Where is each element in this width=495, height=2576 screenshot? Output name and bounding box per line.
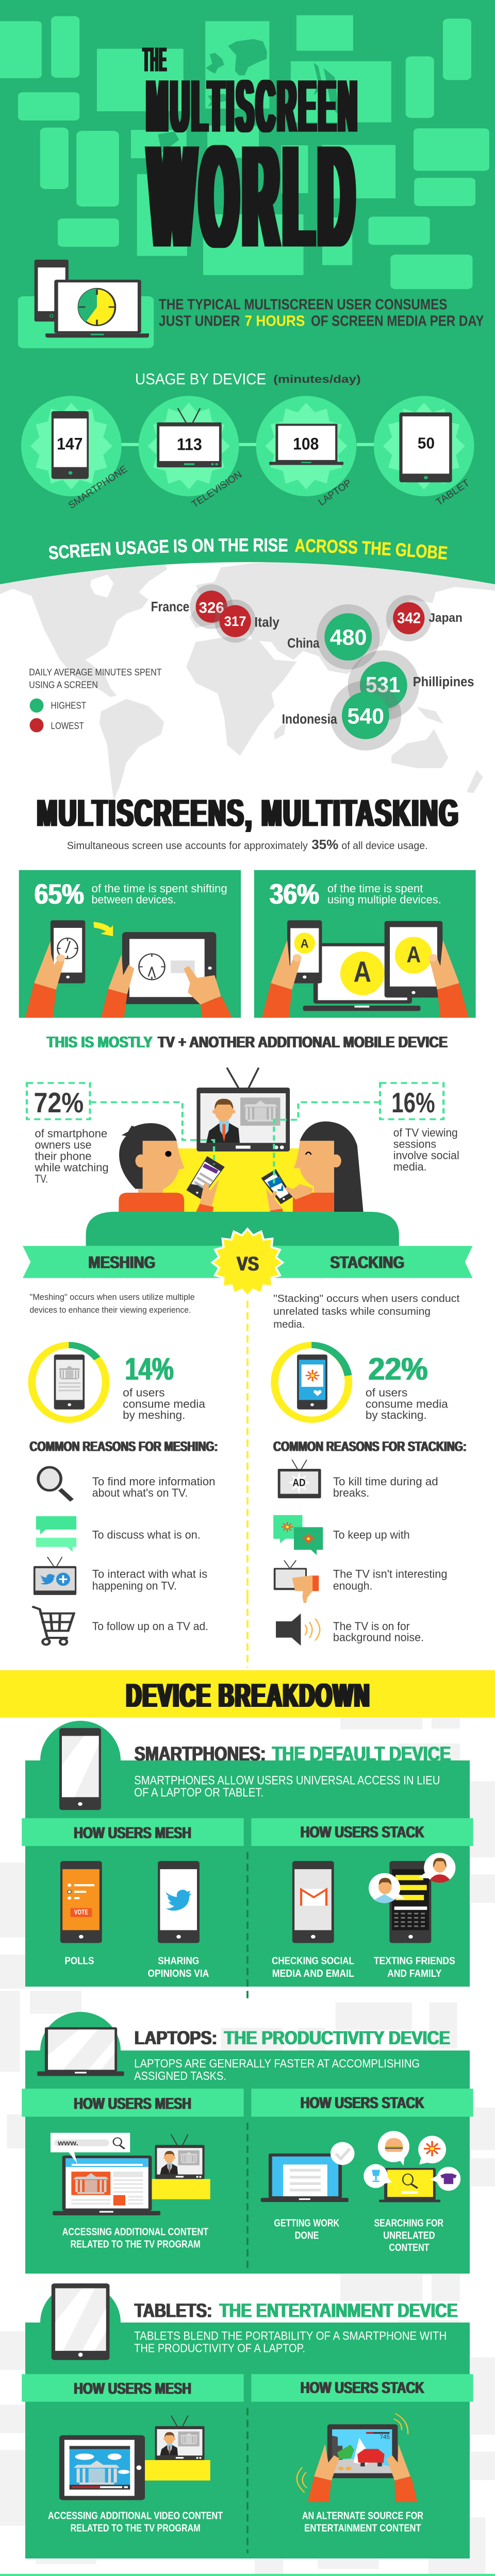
usage: smartphone — [21, 396, 122, 496]
reason: kill time during ad breaks: To kill time during ad — [333, 1476, 438, 1488]
bar: how users mesh: HOW USERS MESH — [74, 2380, 191, 2398]
map bubble: Japan: Japan — [428, 611, 463, 625]
panel: shifting between devices: 65% — [35, 878, 84, 910]
heading: smartphones: SMARTPHONES: — [135, 1742, 266, 1765]
panel: shifting between devices: between devices. — [92, 894, 176, 906]
heading: tablets — [135, 2299, 458, 2321]
heading: laptops — [135, 2027, 450, 2048]
reason: tv not interesting: enough. — [333, 1580, 372, 1592]
reason: keep up with: To keep up with — [333, 1529, 410, 1541]
bar: how users stack — [251, 2374, 473, 2402]
icon: laptop showing letter A: A — [354, 956, 371, 988]
green header background — [0, 0, 495, 584]
bar: how users mesh: HOW USERS MESH — [74, 2094, 191, 2112]
background screens — [0, 1718, 495, 1989]
panel: laptops — [25, 2012, 470, 2274]
icon: phone showing letter A in hand: A — [301, 937, 309, 951]
item: texting friends and family — [369, 1853, 455, 1979]
item: searching for unrelated content: CONTENT — [389, 2242, 430, 2253]
stat: 72 percent: of smartphone — [35, 1128, 107, 1140]
donut: 22 percent stacking — [275, 1345, 349, 1420]
reason: interact — [34, 1557, 207, 1595]
panel: tablets — [25, 2283, 470, 2558]
stat: 16 percent — [274, 1083, 459, 1183]
background screens — [0, 1991, 495, 2370]
text: laptops description: ASSIGNED TASKS. — [134, 2069, 226, 2082]
stat: 72 percent: owners use — [35, 1139, 92, 1151]
icon: tablet with clock and hands — [101, 932, 232, 1018]
stat: 16 percent: of TV viewing — [393, 1127, 458, 1140]
yellow backdrop — [163, 1148, 314, 1212]
ribbon: meshing vs stacking — [23, 1246, 472, 1278]
background screens — [0, 16, 489, 348]
map bubble: France: 326 — [199, 599, 224, 616]
panel: using multiple devices — [254, 870, 476, 1018]
icon: big laptop — [37, 2027, 124, 2076]
map bubble: France: France — [151, 599, 189, 615]
map bubble: Italy — [214, 600, 279, 642]
panel: using multiple devices: using multiple devices. — [327, 894, 441, 906]
globe screens — [97, 15, 395, 275]
reason: find more information — [38, 1467, 216, 1500]
text: stacking definition — [273, 1293, 460, 1330]
badge: vs: VS — [237, 1252, 259, 1275]
stat: 16 percent: sessions — [393, 1138, 436, 1150]
item: getting work done: GETTING WORK — [274, 2217, 339, 2229]
item: accessing additional video content — [48, 2416, 223, 2534]
item: texting friends and family: TEXTING FRIENDS — [374, 1955, 455, 1967]
text: meshing definition: "Meshing" occurs when users utilize multiple — [30, 1292, 195, 1302]
dashed divider — [246, 1852, 249, 1999]
dashed divider end — [246, 1597, 249, 1668]
map bubble: China: 480 — [330, 625, 367, 650]
device labels — [67, 464, 472, 511]
stat: 16 percent: media. — [393, 1161, 427, 1173]
icon: laptop showing letter A — [303, 943, 420, 1011]
text: tablets description — [134, 2329, 447, 2355]
heading: smartphones — [135, 1742, 451, 1765]
stat: 14 percent: by meshing. — [123, 1409, 185, 1422]
usage: television: 113 — [177, 435, 202, 454]
text: smartphones description — [134, 1773, 440, 1800]
band: device breakdown — [0, 1670, 495, 1718]
icon: phone showing letter A in hand — [262, 920, 322, 1018]
reason: discuss: To discuss what is on. — [92, 1529, 201, 1541]
map bubble: Phillipines — [348, 650, 474, 720]
map bubble: China — [287, 604, 380, 669]
map bubble: Japan: 342 — [397, 609, 421, 626]
bar: how users stack — [251, 1818, 473, 1846]
dashed divider — [246, 1300, 249, 1597]
map bubble: Phillipines: Phillipines — [413, 674, 474, 689]
item: checking social media and email: MEDIA AND EMAIL — [272, 1968, 354, 1979]
stat: 16 percent: involve social — [393, 1149, 459, 1162]
item: alternate source for entertainment — [297, 2414, 423, 2534]
reason: follow up on tv ad: To follow up on a TV ad. — [92, 1620, 208, 1633]
thumb tip — [302, 1597, 307, 1603]
icon: big smartphone — [59, 1728, 101, 1810]
item: checking social media and email — [272, 1861, 354, 1979]
map bubble: Phillipines: 531 — [366, 672, 400, 697]
map bubble: Indonesia: Indonesia — [282, 711, 337, 726]
text: stacking definition: media. — [273, 1318, 305, 1330]
stat: 14 percent: 14% — [125, 1352, 174, 1387]
dashed divider — [246, 2123, 249, 2268]
reason: kill time during ad breaks: AD — [293, 1477, 306, 1488]
stat: 72 percent: their phone — [35, 1150, 92, 1163]
reason: kill time during ad breaks — [278, 1460, 438, 1500]
text: typical user consumes 7 hours: JUST UNDER — [159, 313, 240, 329]
item: accessing additional content — [51, 2133, 210, 2250]
heading: laptops: LAPTOPS: — [135, 2027, 217, 2048]
device labels: TABLET — [434, 478, 472, 508]
icon: tablet showing letter A in hand — [385, 921, 469, 1018]
stat: 22 percent: consume media — [366, 1398, 448, 1411]
donut: 14 percent meshing — [32, 1345, 106, 1420]
stat: 22 percent — [366, 1352, 448, 1422]
text: meshing definition: devices to enhance their viewing experience. — [30, 1305, 191, 1315]
item: checking social media and email: CHECKING SOCIAL — [272, 1955, 354, 1967]
heading: common reasons: COMMON REASONS FOR MESHING: — [30, 1439, 218, 1454]
text: typical user consumes 7 hours — [159, 296, 484, 329]
item: polls — [60, 1861, 102, 1967]
item: polls: VOTE — [74, 1908, 88, 1916]
item: alternate source for entertainment: 745 — [380, 2434, 390, 2441]
reason: find more information: about what's on TV. — [92, 1487, 188, 1500]
bar: how users stack: HOW USERS STACK — [301, 1823, 424, 1841]
stat: 16 percent: 16% — [391, 1087, 435, 1118]
band: sources — [0, 2574, 495, 2576]
heading: screen usage across the globe: ACROSS THE GLOBE — [295, 539, 448, 560]
panel: smartphones — [25, 1721, 470, 1987]
map bubble: France — [151, 584, 233, 629]
item: accessing additional content: RELATED TO THE TV PROGRAM — [71, 2239, 201, 2250]
stat: 14 percent: of users — [123, 1387, 165, 1399]
bar: how users stack — [251, 2089, 473, 2116]
item: searching for unrelated content: UNRELATED — [383, 2230, 435, 2242]
usage: television — [139, 396, 239, 496]
icon: phone with clock in hand — [25, 920, 85, 1018]
text: meshing definition — [30, 1292, 195, 1315]
title — [143, 41, 359, 278]
reason: tv not interesting: The TV isn't interesting — [333, 1568, 447, 1581]
stat: 72 percent: 72% — [34, 1087, 84, 1118]
icon: phone and laptop with clock — [35, 260, 149, 337]
map bubble: Indonesia — [282, 681, 401, 751]
heading: screen usage across the globe — [49, 538, 448, 560]
item: accessing additional content: ACCESSING ADDITIONAL CONTENT — [62, 2226, 208, 2238]
icon: tablet showing letter A in hand: A — [407, 941, 421, 968]
world map — [0, 561, 495, 800]
heading: mostly tv plus mobile — [47, 1033, 448, 1051]
bar: how users mesh — [22, 1818, 244, 1846]
panel: shifting between devices — [19, 870, 241, 1018]
device labels: TELEVISION — [190, 469, 244, 510]
heading: usage by device: USAGE BY DEVICE — [135, 370, 266, 388]
text: stacking definition: unrelated tasks while consuming — [273, 1306, 431, 1317]
connectors — [122, 443, 374, 446]
scene: two people watching tv with phones — [119, 1067, 364, 1212]
text: simultaneous screen use — [67, 837, 428, 852]
text: stacking definition: "Stacking" occurs when users conduct — [273, 1293, 460, 1304]
text: tablets description: THE PRODUCTIVITY OF A LAPTOP. — [134, 2342, 305, 2355]
map legend: DAILY AVERAGE MINUTES SPENT — [29, 668, 161, 678]
panel: using multiple devices: of the time is spent — [327, 883, 423, 895]
device labels: SMARTPHONE — [67, 464, 129, 511]
panel: using multiple devices: 36% — [270, 878, 319, 910]
stat: 14 percent — [123, 1352, 205, 1422]
heading: tablets: TABLETS: — [135, 2299, 212, 2321]
text: simultaneous screen use: 35% — [311, 837, 338, 852]
reason: discuss — [36, 1516, 201, 1552]
reason: kill time during ad breaks: breaks. — [333, 1487, 369, 1500]
text: simultaneous screen use: Simultaneous screen use accounts for approximately — [67, 840, 308, 851]
badge: vs — [212, 1229, 283, 1296]
item: sharing opinions: SHARING — [158, 1955, 199, 1967]
reason: follow up on tv ad — [32, 1606, 208, 1645]
map bubble: Japan — [386, 595, 463, 641]
title: THE — [143, 41, 168, 79]
woman — [261, 1122, 364, 1212]
reason: find more information: To find more information — [92, 1476, 216, 1488]
item: accessing additional video content: ACCESSING ADDITIONAL VIDEO CONTENT — [48, 2510, 223, 2521]
map legend: LOWEST — [51, 721, 84, 731]
device labels: LAPTOP — [317, 478, 354, 508]
ribbon: meshing vs stacking: STACKING — [330, 1252, 404, 1272]
reason: interact: To interact with what is — [92, 1568, 207, 1581]
heading: mostly tv plus mobile: THIS IS MOSTLY — [47, 1033, 153, 1051]
map bubble: Indonesia: 540 — [347, 704, 384, 729]
stat: 14 percent: consume media — [123, 1398, 205, 1411]
item: getting work done: DONE — [295, 2230, 319, 2242]
map bubble: China: China — [287, 636, 320, 651]
item: sharing opinions — [148, 1861, 209, 1979]
heading: screen usage across the globe: SCREEN USAGE IS ON THE RISE — [49, 538, 288, 560]
reason: background noise: The TV is on for — [333, 1620, 410, 1633]
stat: 22 percent: 22% — [368, 1352, 428, 1387]
usage: laptop — [256, 396, 356, 496]
heading: common reasons — [30, 1439, 467, 1454]
bar: how users mesh: HOW USERS MESH — [74, 1824, 191, 1842]
panel: shifting between devices: of the time is spent shifting — [92, 883, 227, 895]
heading: usage by device: (minutes/day) — [273, 374, 361, 385]
item: searching for unrelated content: SEARCHING FOR — [374, 2217, 443, 2229]
arrow: shift to tablet — [93, 922, 113, 936]
ribbon: meshing vs stacking: MESHING — [88, 1252, 155, 1272]
text: simultaneous screen use: of all device usage. — [341, 840, 428, 851]
map legend: USING A SCREEN — [29, 680, 98, 690]
item: searching for unrelated content — [364, 2131, 460, 2253]
stat: 72 percent — [27, 1083, 214, 1185]
item: accessing additional content: www. — [57, 2139, 78, 2147]
map bubble: Italy: 317 — [224, 614, 246, 629]
text: laptops description — [134, 2057, 420, 2082]
usage: tablet: 50 — [418, 434, 435, 452]
man — [119, 1123, 225, 1212]
text: smartphones description: OF A LAPTOP OR TABLET. — [134, 1786, 263, 1800]
map legend — [29, 668, 161, 732]
tv with news anchor — [196, 1067, 290, 1151]
usage: laptop: 108 — [293, 434, 319, 453]
usage: tablet — [374, 396, 474, 496]
item: polls: POLLS — [65, 1955, 94, 1967]
green hump — [86, 1212, 399, 1246]
reason: tv not interesting — [274, 1561, 447, 1597]
reason: background noise — [276, 1614, 424, 1646]
item: getting work done — [261, 2142, 355, 2242]
stat: 72 percent: TV. — [35, 1173, 48, 1185]
dashed divider — [246, 2408, 249, 2553]
icon: big tablet — [52, 2283, 109, 2360]
item: texting friends and family: AND FAMILY — [387, 1968, 441, 1979]
reason: background noise: background noise. — [333, 1632, 424, 1644]
stat: 72 percent: while watching — [34, 1161, 109, 1174]
background screens — [0, 2357, 495, 2576]
bar: how users mesh — [22, 2089, 244, 2116]
usage: smartphone: 147 — [57, 434, 82, 453]
text: typical user consumes 7 hours: 7 HOURS — [244, 313, 305, 329]
map legend: HIGHEST — [51, 701, 86, 711]
reason: interact: happening on TV. — [92, 1580, 177, 1592]
bar: how users mesh — [22, 2374, 244, 2402]
item: accessing additional video content: RELATED TO THE TV PROGRAM — [71, 2522, 201, 2534]
stat: 22 percent: of users — [366, 1387, 407, 1399]
map bubble: Italy: Italy — [254, 615, 279, 630]
reason: keep up with — [273, 1515, 410, 1555]
stat: 22 percent: by stacking. — [366, 1409, 427, 1422]
item: sharing opinions: OPINIONS VIA — [148, 1968, 209, 1979]
